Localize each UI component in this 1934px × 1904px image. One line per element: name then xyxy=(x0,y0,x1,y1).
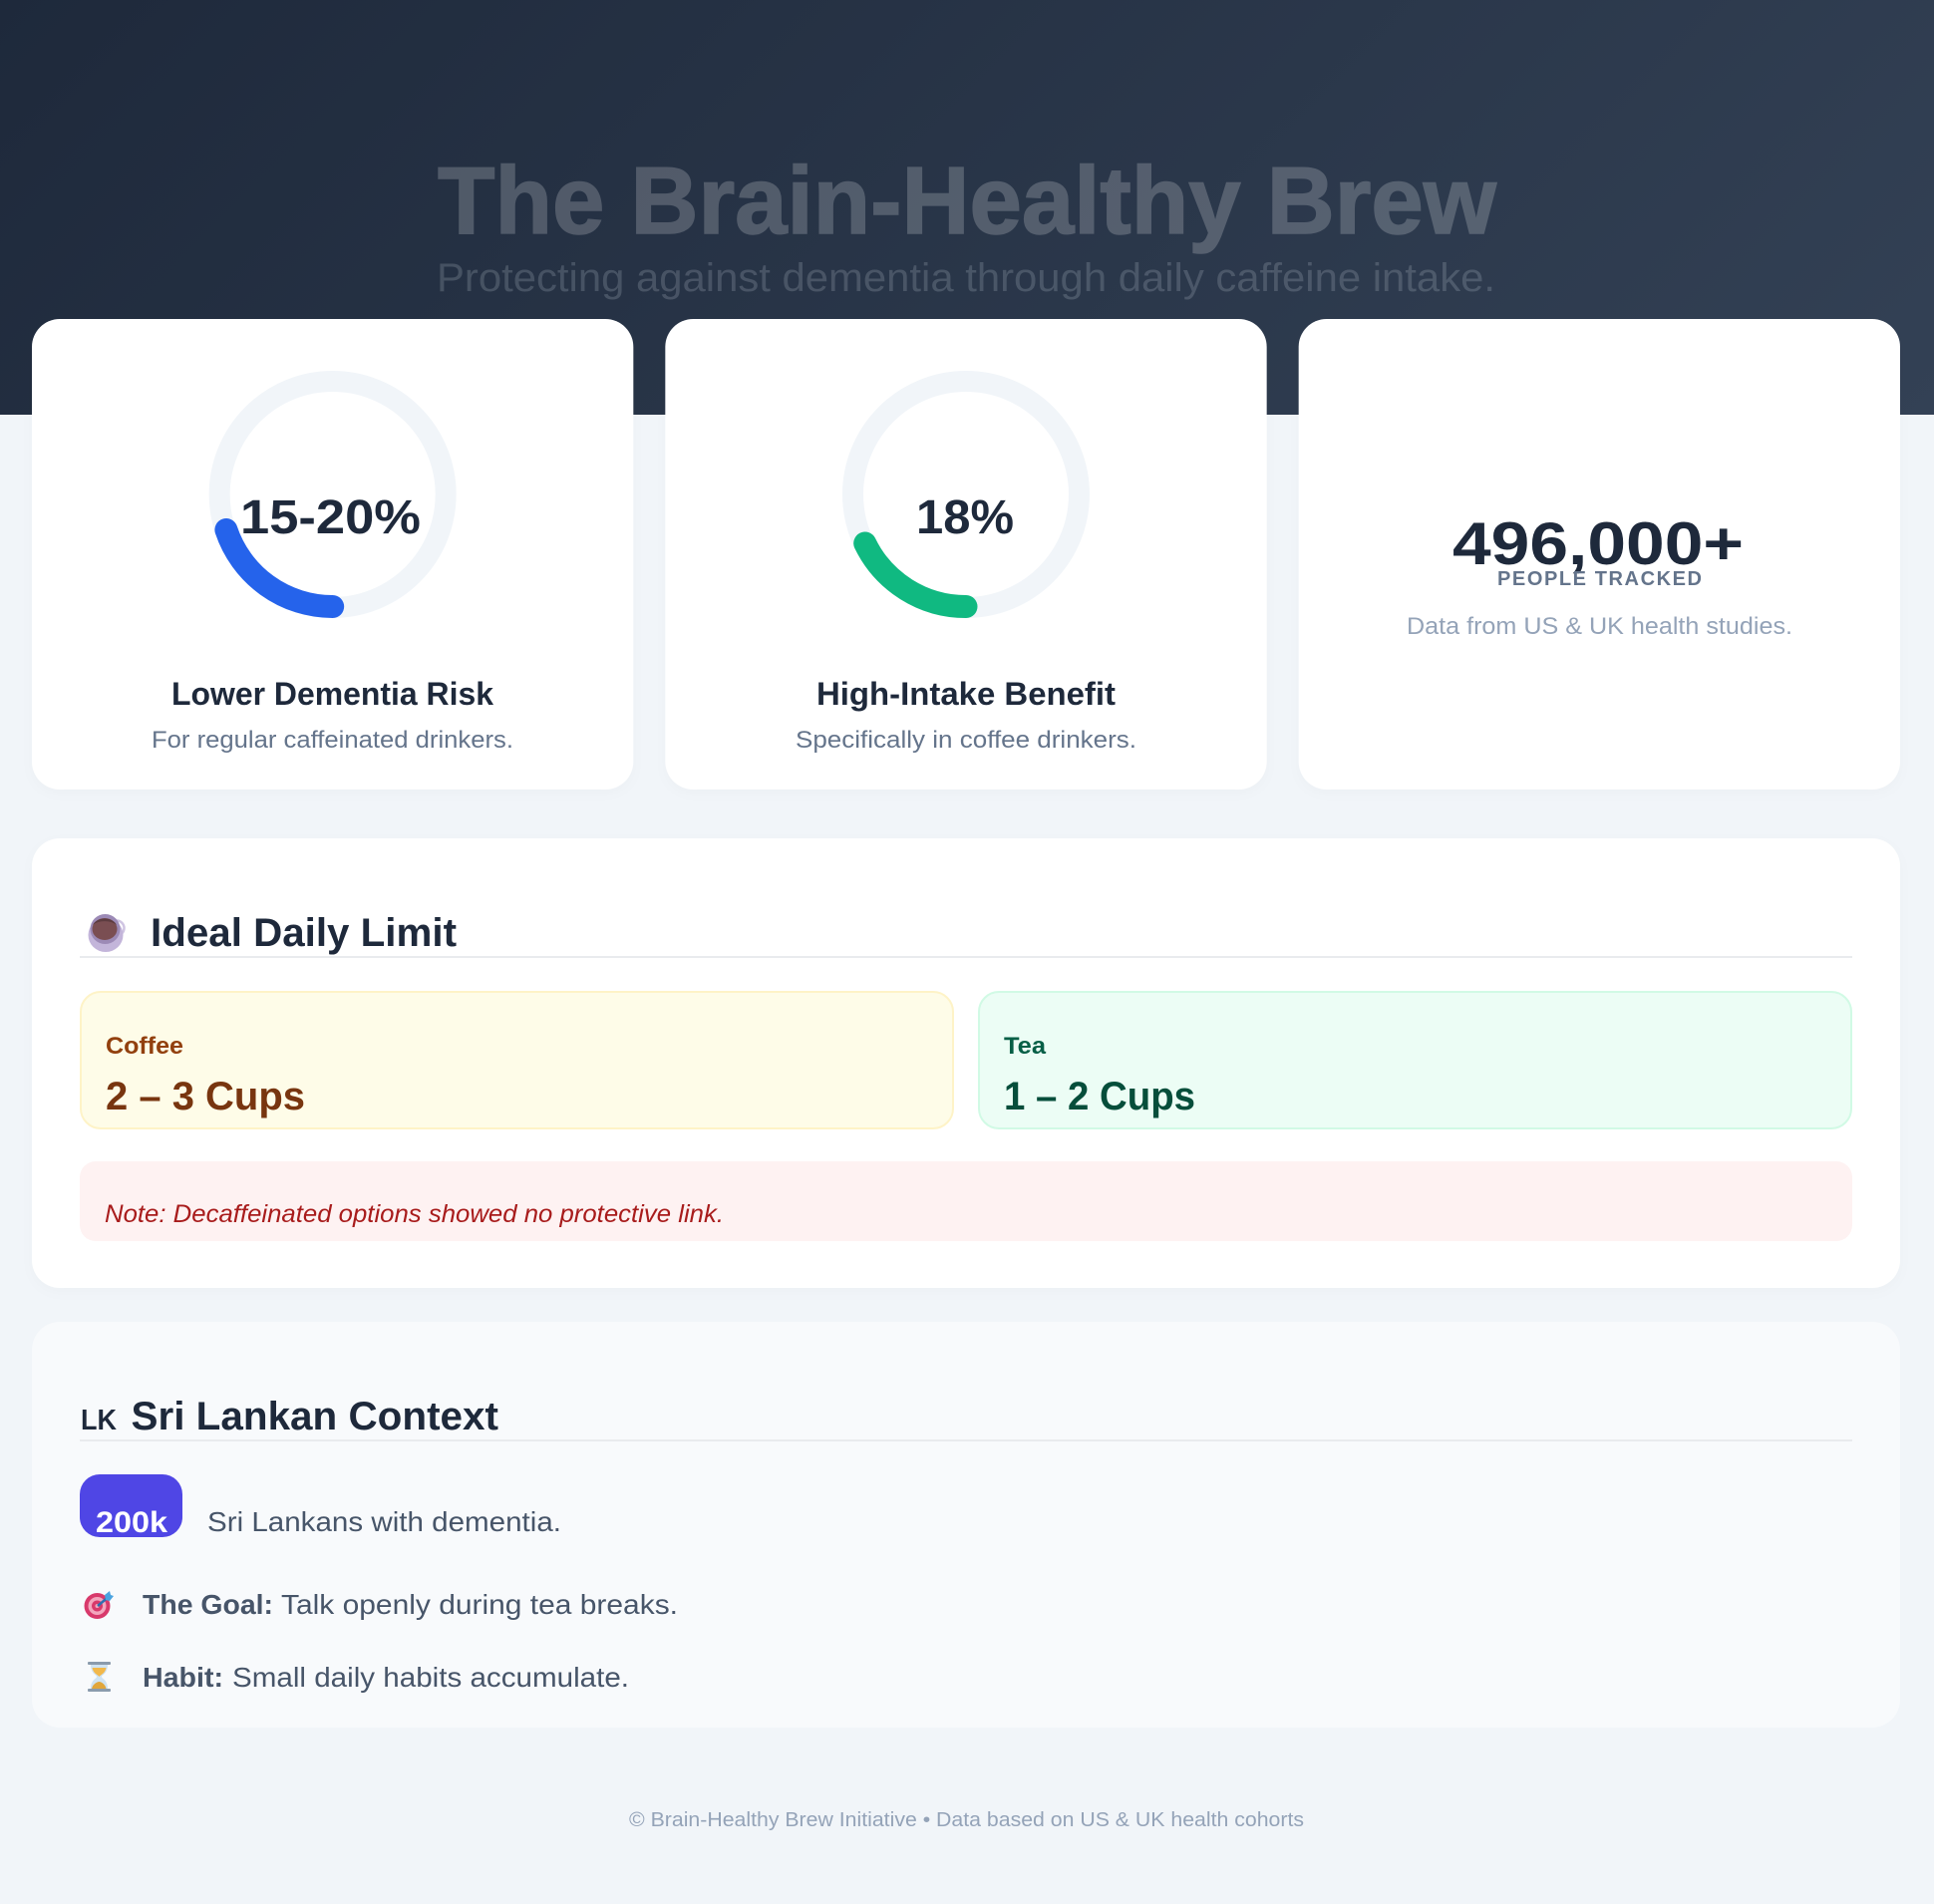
card description: For regular caffeinated drinkers. xyxy=(152,727,513,754)
habit text xyxy=(143,1662,629,1693)
stat label: PEOPLE TRACKED xyxy=(1497,568,1702,590)
icon: LK flag letters: LK xyxy=(81,1405,117,1436)
icon: hourglass xyxy=(88,1662,111,1692)
title: The Brain-Healthy Brew xyxy=(438,148,1496,254)
donut chart: 18% xyxy=(853,381,1079,608)
icon: coffee cup xyxy=(88,914,124,952)
note box xyxy=(80,1161,1852,1241)
panel: sri lankan context xyxy=(32,1322,1900,1728)
section heading: Sri Lankan Context xyxy=(132,1395,498,1438)
stat description: Data from US & UK health studies. xyxy=(1407,613,1792,640)
note text: Note: Decaffeinated options showed no protective link. xyxy=(105,1200,724,1228)
habit label: Habit: xyxy=(143,1662,223,1693)
goal body: Talk openly during tea breaks. xyxy=(281,1589,678,1620)
tea value: 1 – 2 Cups xyxy=(1004,1075,1195,1118)
goal text xyxy=(143,1589,678,1620)
icon: target xyxy=(84,1591,114,1619)
habit body: Small daily habits accumulate. xyxy=(232,1662,629,1693)
coffee value: 2 – 3 Cups xyxy=(106,1075,305,1118)
donut value: 18% xyxy=(916,491,1014,544)
donut chart: 15-20% xyxy=(219,381,446,608)
tea box xyxy=(979,992,1851,1128)
donut value: 15-20% xyxy=(240,491,421,544)
panel: high-intake benefit card xyxy=(665,319,1267,790)
section heading: Ideal Daily Limit xyxy=(151,911,457,955)
badge description: Sri Lankans with dementia. xyxy=(207,1506,561,1537)
card label: Lower Dementia Risk xyxy=(171,676,493,712)
header band xyxy=(0,0,1934,415)
card description: Specifically in coffee drinkers. xyxy=(796,727,1136,754)
panel: people tracked card xyxy=(1299,319,1900,790)
goal label: The Goal: xyxy=(143,1589,273,1620)
coffee box xyxy=(81,992,953,1128)
coffee label: Coffee xyxy=(106,1033,183,1060)
panel: ideal daily limit xyxy=(32,838,1900,1288)
badge value: 200k xyxy=(96,1506,167,1539)
panel: lower dementia risk card xyxy=(32,319,633,790)
footer: © Brain-Healthy Brew Initiative • Data based on US & UK health cohorts xyxy=(629,1809,1304,1831)
tea label: Tea xyxy=(1004,1033,1047,1060)
subtitle: Protecting against dementia through daily caffeine intake. xyxy=(437,256,1495,300)
badge: 200k xyxy=(80,1474,182,1539)
card label: High-Intake Benefit xyxy=(816,676,1116,712)
big number: 496,000+ xyxy=(1452,510,1744,577)
